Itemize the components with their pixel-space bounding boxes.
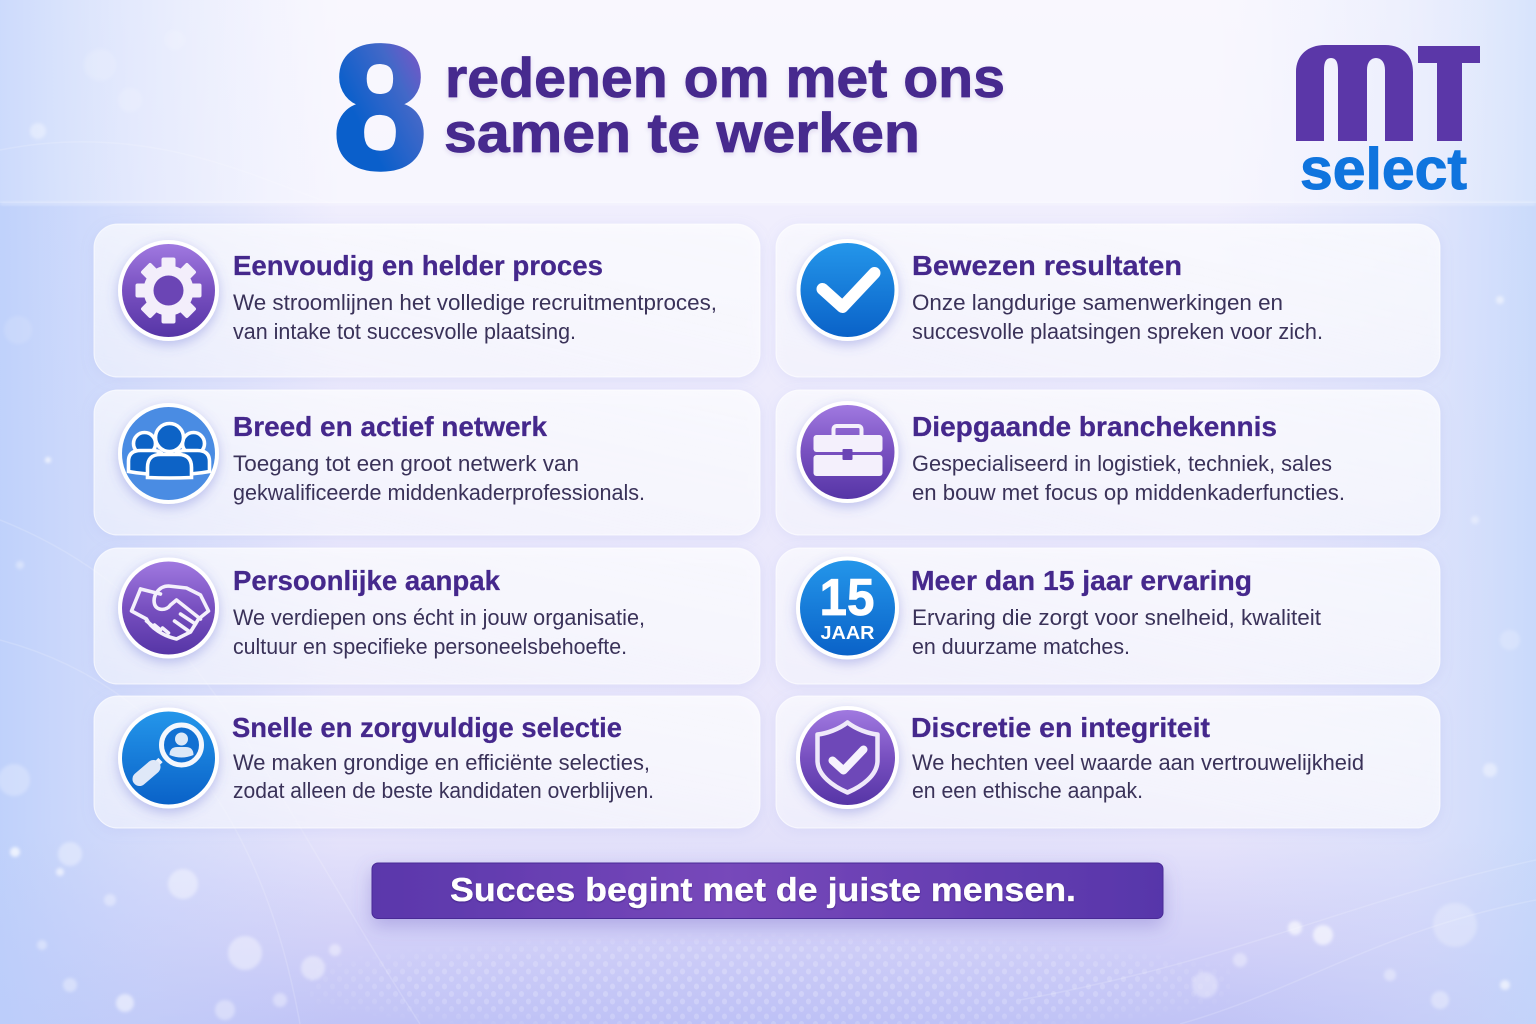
- body text: We verdiepen ons écht in jouw organisatie,: [233, 605, 645, 630]
- icon: magnifier: [118, 708, 219, 808]
- heading: Discretie en integriteit: [911, 712, 1210, 743]
- icon: shield: [796, 706, 899, 809]
- body text: succesvolle plaatsingen spreken voor zich.: [912, 319, 1323, 344]
- icon: 15 jaar badge: 15: [820, 569, 874, 627]
- body text: Toegang tot een groot netwerk van: [233, 451, 579, 476]
- banner: slogan: [372, 863, 1163, 918]
- body text: [233, 451, 645, 505]
- body text: We hechten veel waarde aan vertrouwelijkheid: [912, 750, 1364, 775]
- title heading: samen te werken: [444, 101, 920, 164]
- body text: [912, 750, 1364, 803]
- body text: en bouw met focus op middenkaderfuncties.: [912, 480, 1345, 505]
- body text: gekwalificeerde middenkaderprofessionals.: [233, 480, 645, 505]
- body text: zodat alleen de beste kandidaten overblijven.: [233, 778, 654, 803]
- body text: van intake tot succesvolle plaatsing.: [233, 319, 576, 344]
- panel: Eenvoudig en helder proces: [94, 224, 760, 377]
- panel: Snelle en zorgvuldige selectie: [94, 696, 760, 828]
- body text: cultuur en specifieke personeelsbehoefte.: [233, 634, 627, 659]
- logo: MT select: [1296, 45, 1480, 202]
- body text: [912, 605, 1321, 659]
- icon: 15 jaar badge: [796, 556, 899, 660]
- icon: handshake: [118, 558, 219, 658]
- heading: Meer dan 15 jaar ervaring: [911, 565, 1252, 596]
- icon: 15 jaar badge: JAAR: [820, 623, 874, 643]
- heading: Bewezen resultaten: [912, 250, 1182, 281]
- body text: en duurzame matches.: [912, 634, 1130, 659]
- body text: [912, 290, 1323, 344]
- body text: We maken grondige en efficiënte selecties,: [233, 750, 650, 775]
- heading: Eenvoudig en helder proces: [233, 250, 603, 281]
- panel: Bewezen resultaten: [776, 224, 1440, 377]
- body text: Gespecialiseerd in logistiek, techniek, sales: [912, 451, 1332, 476]
- panel: Discretie en integriteit: [776, 696, 1440, 828]
- logo: MT select: select: [1300, 137, 1467, 202]
- panel: Diepgaande branchekennis: [776, 390, 1440, 535]
- heading: Breed en actief netwerk: [233, 411, 548, 442]
- title heading: [444, 46, 1005, 164]
- heading: Snelle en zorgvuldige selectie: [232, 712, 622, 743]
- body text: [233, 605, 645, 659]
- title heading: redenen om met ons: [445, 46, 1005, 109]
- heading: Diepgaande branchekennis: [912, 411, 1277, 442]
- body text: [912, 451, 1345, 505]
- icon: briefcase: [796, 401, 898, 503]
- body text: Onze langdurige samenwerkingen en: [912, 290, 1283, 315]
- heading: Persoonlijke aanpak: [233, 565, 501, 596]
- body text: en een ethische aanpak.: [912, 778, 1143, 803]
- body text: We stroomlijnen het volledige recruitmentproces,: [233, 290, 717, 315]
- panel: Breed en actief netwerk: [94, 390, 760, 535]
- body text: [233, 290, 717, 344]
- icon: check mark: [796, 239, 898, 341]
- icon: gear: [118, 240, 219, 341]
- body text: [233, 750, 654, 803]
- panel: Meer dan 15 jaar ervaring: [776, 548, 1440, 684]
- banner: slogan: Succes begint met de juiste mensen.: [450, 871, 1076, 908]
- icon: people: [118, 403, 219, 504]
- title: big number 8: 8: [333, 10, 427, 206]
- body text: Ervaring die zorgt voor snelheid, kwaliteit: [912, 605, 1321, 630]
- panel: Persoonlijke aanpak: [94, 548, 760, 684]
